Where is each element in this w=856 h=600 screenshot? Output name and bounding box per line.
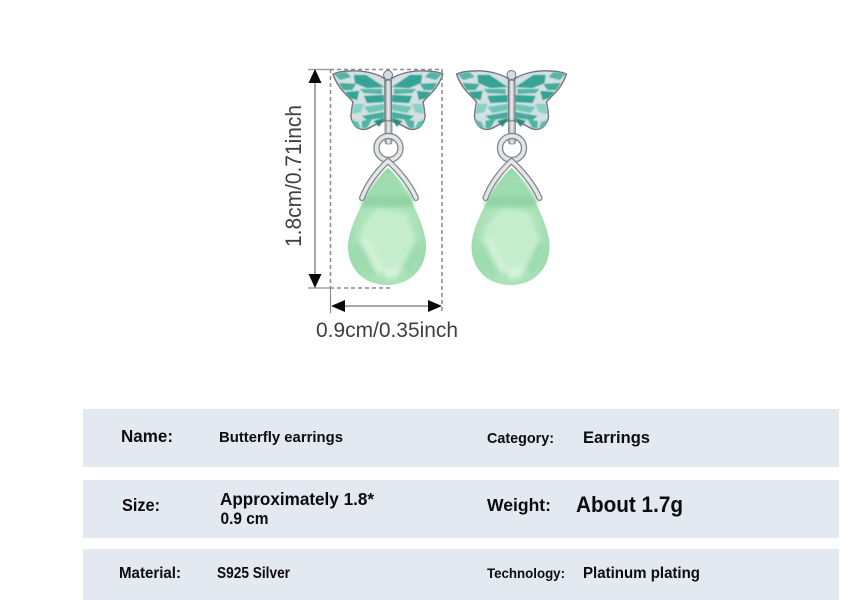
width label: 0.9cm/0.35inch	[316, 318, 458, 342]
size value second line: 0.9 cm	[220, 509, 268, 528]
material label: Material:	[119, 565, 181, 582]
right earring with butterfly and teardrop	[456, 70, 566, 285]
dimension guide lines	[308, 69, 442, 313]
weight label: Weight:	[487, 495, 551, 515]
category label: Category:	[487, 430, 554, 447]
height arrow	[308, 69, 322, 288]
weight value: About 1.7g	[576, 492, 683, 517]
size value: Approximately 1.8*	[220, 489, 374, 509]
technology value: Platinum plating	[583, 565, 700, 582]
technology label: Technology:	[487, 566, 565, 581]
width arrow	[331, 300, 442, 312]
name label: Name:	[121, 426, 173, 446]
category value: Earrings	[583, 428, 650, 447]
spec row band 3	[83, 549, 839, 600]
name value: Butterfly earrings	[219, 429, 343, 446]
material value: S925 Silver	[217, 565, 290, 582]
left earring with butterfly and teardrop	[333, 70, 443, 285]
spec row band 2	[83, 480, 839, 538]
size label: Size:	[122, 495, 160, 515]
spec row band 1	[83, 409, 839, 467]
height label: 1.8cm/0.71inch	[281, 105, 306, 247]
